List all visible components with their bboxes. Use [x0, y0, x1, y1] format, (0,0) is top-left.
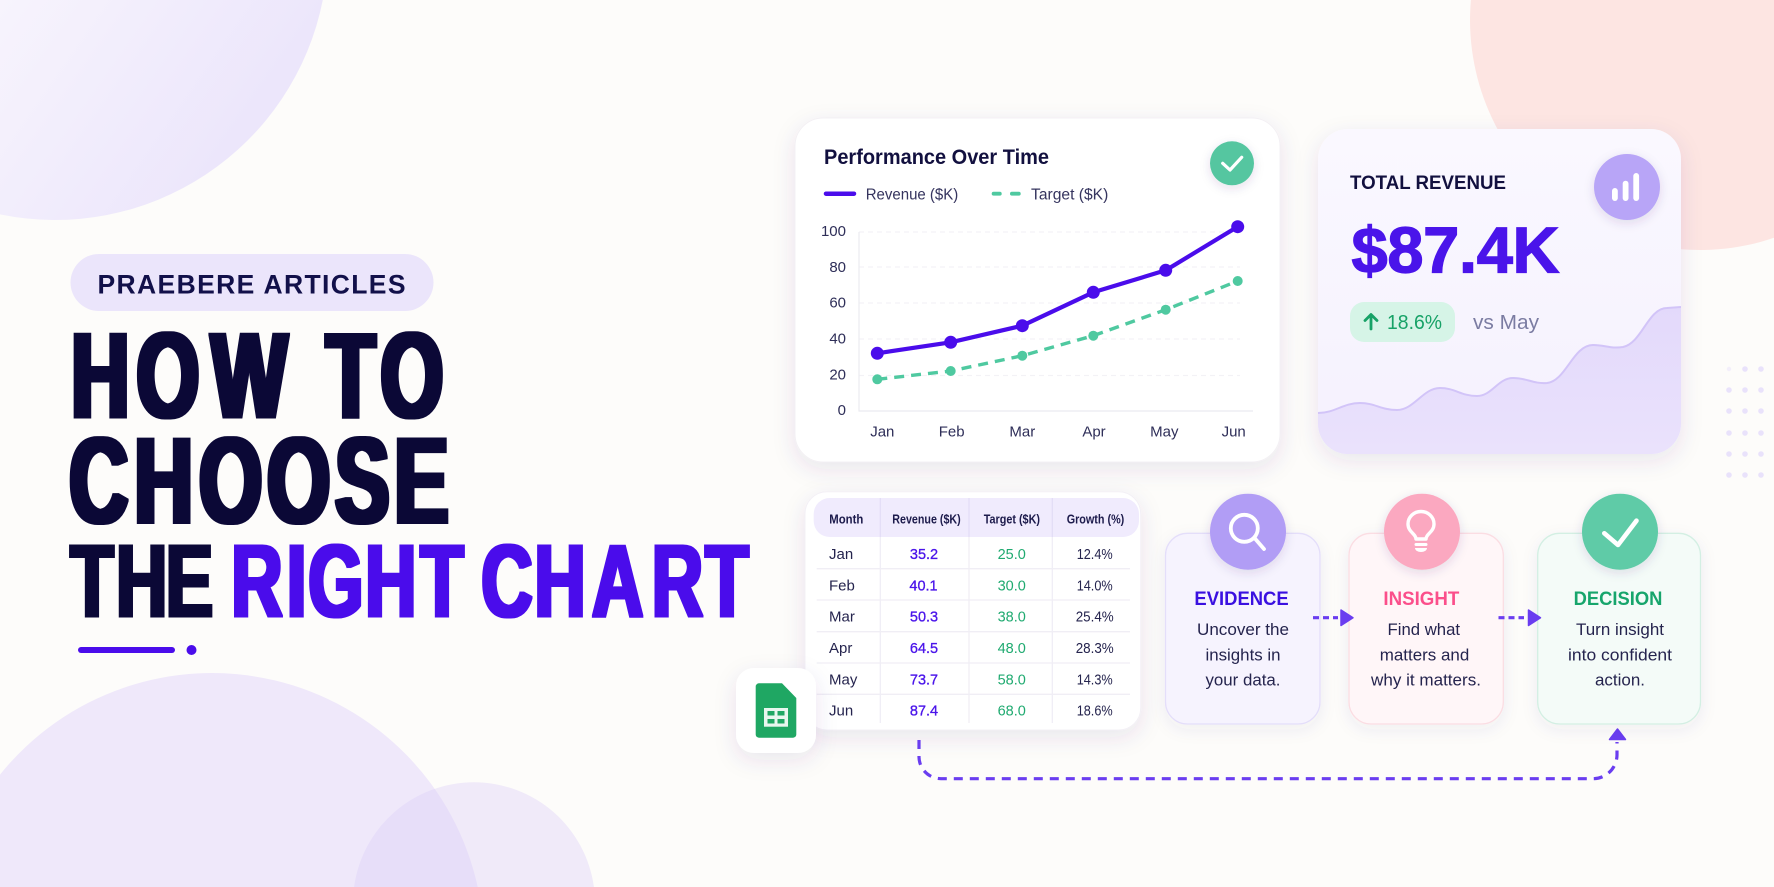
- title: CHOOSE: [69, 413, 449, 550]
- growth pill: [1350, 302, 1455, 342]
- table rows: 28.3%: [1076, 641, 1114, 657]
- decision text: action.: [1595, 672, 1645, 690]
- KPI label: TOTAL REVENUE: [1350, 173, 1506, 194]
- KPI value: $87.4K: [1352, 214, 1560, 286]
- table rows: 25.4%: [1076, 610, 1114, 626]
- eyebrow pill: PRAEBERE ARTICLES: [98, 270, 406, 300]
- table rows: 40.1: [909, 578, 938, 594]
- y axis labels: 80: [829, 259, 846, 276]
- table rows: 58.0: [998, 672, 1026, 688]
- decision text: into confident: [1568, 646, 1672, 664]
- x axis labels: Feb: [939, 424, 965, 441]
- arrow: insight to decision: [1498, 610, 1540, 626]
- table rows: 14.0%: [1077, 578, 1113, 594]
- table header: Revenue ($K): [892, 512, 961, 526]
- table header: Target ($K): [984, 512, 1040, 526]
- table rows: 64.5: [910, 641, 938, 657]
- revenue series: [871, 220, 1244, 360]
- table header: [829, 512, 1124, 526]
- y axis labels: [821, 223, 846, 419]
- panel: decision step: [1538, 494, 1700, 724]
- legend: [826, 186, 1108, 203]
- eyebrow pill: [70, 254, 434, 311]
- table rows: 14.3%: [1077, 672, 1113, 688]
- icon: magnifier: [1210, 494, 1286, 570]
- table rows: [829, 546, 1114, 720]
- table rows: 68.0: [998, 704, 1026, 720]
- y axis labels: 100: [821, 223, 846, 240]
- title: [69, 306, 749, 638]
- title: HOW TO: [71, 306, 443, 443]
- title: THE: [70, 523, 213, 638]
- y axis labels: 0: [838, 402, 846, 419]
- table rows: Mar: [829, 609, 855, 626]
- icon: light bulb: [1384, 494, 1460, 570]
- icon: bar chart badge: [1594, 154, 1660, 220]
- arrow: evidence to insight: [1313, 610, 1353, 626]
- evidence text: Uncover the: [1197, 621, 1289, 639]
- y axis labels: 20: [829, 366, 846, 384]
- table rows: May: [829, 671, 858, 688]
- decision heading: DECISION: [1574, 589, 1662, 610]
- title: RIGHT CHART: [231, 523, 749, 638]
- table rows: 25.0: [998, 547, 1026, 563]
- x axis labels: [870, 424, 1246, 441]
- growth pill: 18.6%: [1387, 311, 1442, 334]
- y axis labels: 40: [829, 330, 846, 348]
- table header: Growth (%): [1067, 512, 1124, 526]
- panel: insight step: [1349, 494, 1503, 724]
- x axis labels: May: [1150, 424, 1179, 441]
- table rows: 87.4: [910, 704, 938, 720]
- table rows: 30.0: [998, 578, 1026, 594]
- insight text: why it matters.: [1370, 672, 1481, 690]
- legend: Revenue ($K): [866, 186, 958, 203]
- insight text: [1370, 621, 1481, 690]
- table rows: 50.3: [910, 610, 938, 626]
- arrow: table to decision loop: [919, 729, 1626, 779]
- table rows: 18.6%: [1077, 704, 1113, 720]
- title underline accent: [78, 645, 196, 655]
- table rows: 73.7: [910, 672, 938, 688]
- x axis labels: Jan: [870, 424, 894, 441]
- insight heading: INSIGHT: [1383, 589, 1460, 610]
- evidence text: [1197, 621, 1289, 690]
- table rows: 12.4%: [1077, 547, 1113, 563]
- panel: total revenue KPI: [1318, 129, 1681, 454]
- evidence text: insights in: [1206, 646, 1280, 664]
- chart title: Performance Over Time: [824, 146, 1049, 169]
- table rows: Jan: [829, 546, 853, 563]
- table rows: Apr: [829, 640, 852, 657]
- dot pattern: [1726, 366, 1764, 478]
- panel: data table: [805, 492, 1141, 730]
- decision text: Turn insight: [1576, 621, 1664, 639]
- table rows: Feb: [829, 577, 855, 594]
- x axis labels: Apr: [1082, 424, 1106, 441]
- panel: evidence step: [1166, 494, 1320, 724]
- legend: Target ($K): [1031, 186, 1108, 203]
- evidence heading: EVIDENCE: [1194, 589, 1289, 610]
- table rows: Jun: [829, 703, 853, 720]
- table rows: 48.0: [998, 641, 1026, 657]
- table header: Month: [829, 512, 863, 526]
- insight text: Find what: [1388, 621, 1460, 639]
- icon: check badge: [1582, 494, 1658, 570]
- x axis labels: Mar: [1009, 424, 1035, 441]
- area sparkline: [1318, 307, 1681, 454]
- icon: spreadsheet app: [736, 668, 816, 753]
- y axis labels: 60: [829, 294, 846, 312]
- table rows: 38.0: [998, 610, 1026, 626]
- x axis labels: Jun: [1222, 424, 1246, 441]
- table rows: 35.2: [910, 547, 938, 563]
- target series: [872, 276, 1243, 384]
- insight text: matters and: [1380, 646, 1469, 664]
- comparison label: vs May: [1473, 311, 1540, 334]
- decision text: [1568, 621, 1672, 690]
- icon: check badge: [1210, 141, 1254, 185]
- evidence text: your data.: [1206, 672, 1280, 690]
- panel: performance line chart: [795, 118, 1280, 462]
